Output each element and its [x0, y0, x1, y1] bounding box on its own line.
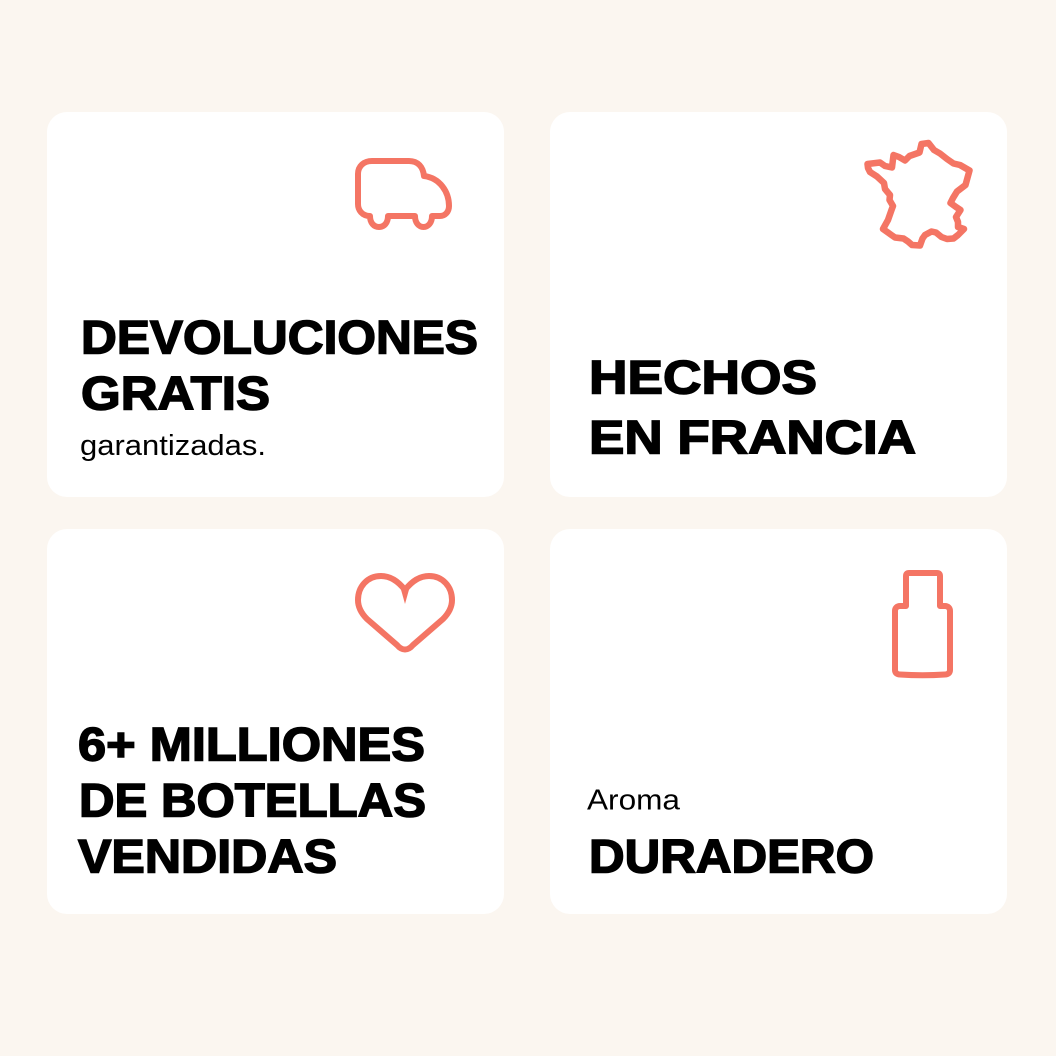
- panel: botellas vendidas: [47, 529, 504, 914]
- heading: hechos: HECHOS: [589, 350, 817, 404]
- text: aroma: Aroma: [587, 784, 680, 816]
- icon: map of France: [868, 143, 970, 246]
- heading line: gratis: GRATIS: [81, 366, 270, 420]
- heading: vendidas: VENDIDAS: [78, 830, 337, 882]
- panel: devoluciones gratis: [47, 112, 504, 497]
- heading: de botellas: DE BOTELLAS: [79, 774, 426, 826]
- icon: perfume bottle: [895, 573, 950, 675]
- icon: heart: [358, 576, 452, 650]
- text: garantizadas: garantizadas.: [80, 430, 266, 462]
- heading: 6+ millones: 6+ MILLIONES: [78, 718, 425, 770]
- icon: delivery truck: [358, 161, 449, 227]
- heading: en francia: EN FRANCIA: [589, 410, 916, 464]
- heading: devoluciones gratis: DEVOLUCIONES: [81, 310, 478, 364]
- heading: duradero: DURADERO: [589, 830, 874, 882]
- panel: aroma duradero: [550, 529, 1007, 914]
- panel: hechos en francia: [550, 112, 1007, 497]
